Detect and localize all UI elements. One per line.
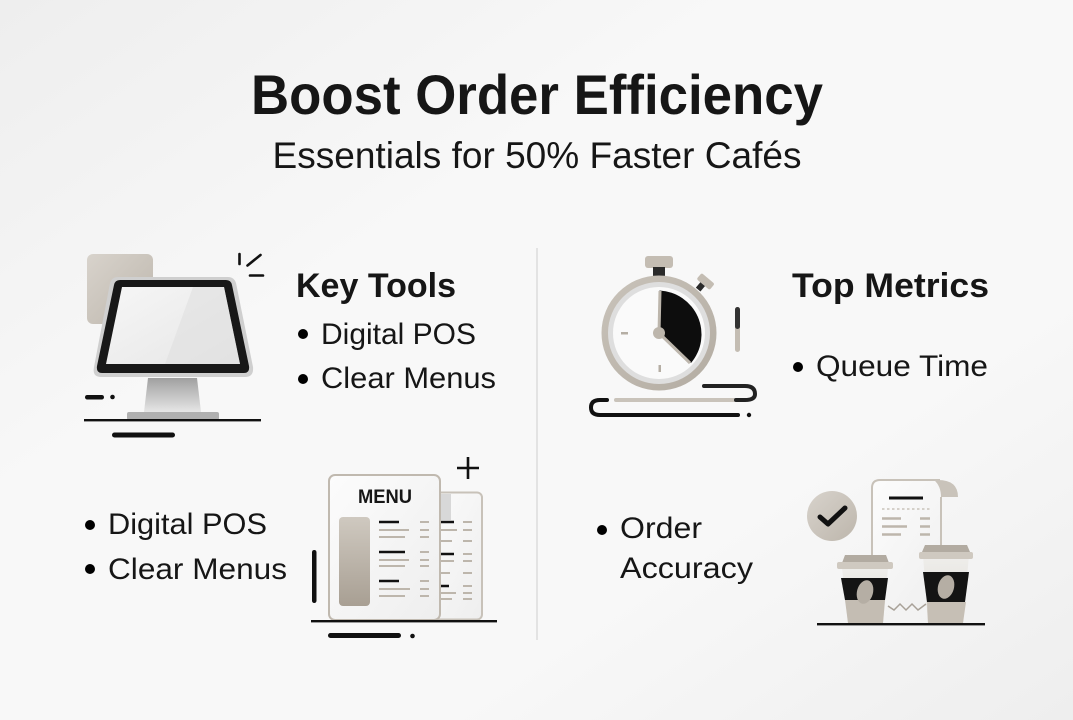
list: digital pos and clear menus: Clear Menus: [108, 553, 287, 586]
icon: coffee cup left: [837, 555, 893, 623]
title: Boost Order Efficiency: [251, 63, 823, 126]
icon: menus: [311, 457, 497, 638]
heading: top metrics: Top Metrics: [792, 267, 989, 305]
list: digital pos and clear menus: [85, 508, 287, 586]
list: key tools: Clear Menus: [321, 362, 496, 395]
icon: check badge: [807, 491, 857, 541]
list: key tools: Digital POS: [321, 318, 476, 351]
panel: top metrics: [792, 267, 989, 383]
subtitle: Essentials for 50% Faster Cafés: [272, 135, 802, 176]
icon: stopwatch: [591, 256, 755, 417]
list: queue time: Queue Time: [816, 350, 988, 383]
list: digital pos and clear menus: Digital POS: [108, 508, 267, 541]
list: order accuracy: [597, 512, 753, 585]
icon: coffee cup right: [919, 545, 973, 623]
icon: receipt and coffee cups: [807, 480, 985, 625]
list: order accuracy: Accuracy: [620, 552, 753, 585]
icon: menus: MENU: [358, 487, 412, 508]
list: key tools: [298, 318, 496, 395]
heading: key tools: Key Tools: [296, 267, 456, 305]
list: order accuracy: Order: [620, 512, 702, 545]
panel: key tools: [296, 267, 496, 395]
icon: POS terminal: [84, 254, 263, 438]
